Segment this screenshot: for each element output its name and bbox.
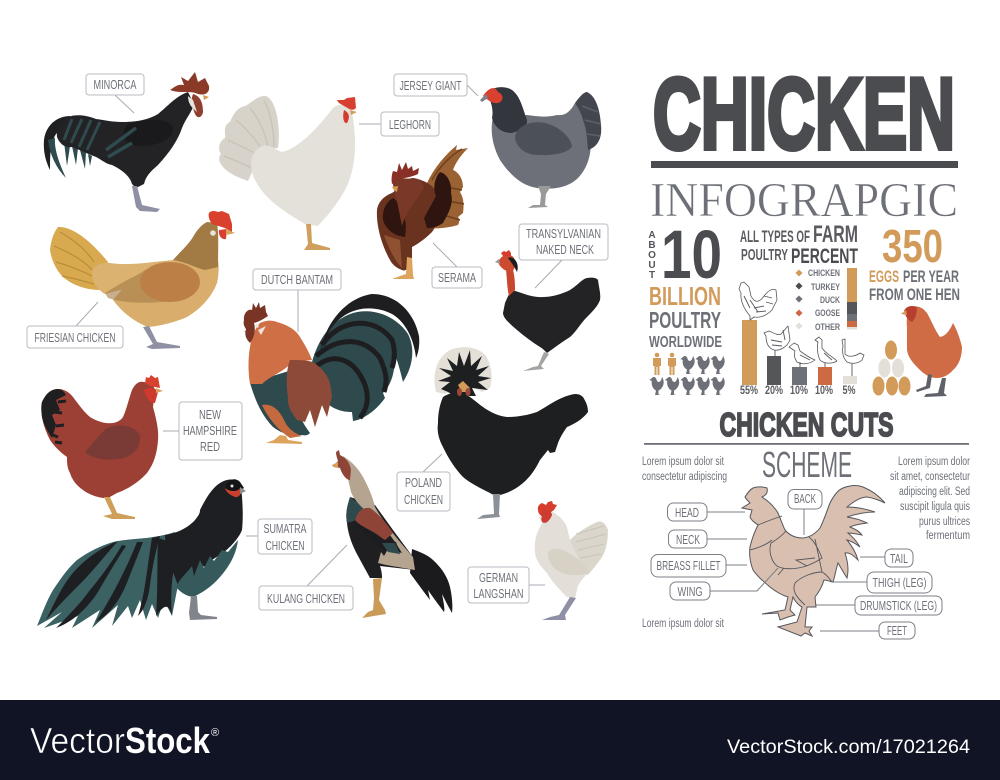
footer url: VectorStock.com/17021264 — [727, 737, 970, 758]
diagram: chicken cuts rooster — [742, 486, 885, 636]
label: German Langshan: LANGSHAN — [474, 586, 524, 601]
bar chart: poultry percentages: 20% — [765, 385, 783, 397]
callout: thigh — [833, 572, 932, 593]
text: lorem left — [642, 456, 727, 483]
label: Serama: SERAMA — [438, 270, 476, 285]
label: Minorca — [86, 74, 144, 113]
icon: line-art goose — [815, 337, 837, 367]
label: Transylvanian Naked Neck: TRANSYLVANIAN — [526, 226, 601, 241]
legend: poultry types — [795, 268, 840, 332]
stacked bar — [847, 268, 857, 330]
label: Sumatra Chicken: CHICKEN — [266, 538, 304, 553]
label: New Hampshire Red: NEW — [199, 407, 222, 422]
callout: head — [668, 503, 745, 521]
chicken: Dutch Bantam — [243, 294, 419, 444]
label: Friesian Chicken: FRIESIAN CHICKEN — [34, 330, 116, 345]
label: Leghorn — [359, 112, 439, 136]
heading: all types of farm poultry percent: POULTRY — [741, 247, 788, 264]
text: billion: BILLION — [649, 281, 721, 311]
footer logo — [30, 720, 219, 761]
icons: people to poultry ratio — [650, 353, 725, 395]
label: Transylvanian Naked Neck: NAKED NECK — [536, 242, 594, 257]
text: poultry: POULTRY — [649, 307, 721, 333]
chicken: New Hampshire Red — [41, 375, 163, 519]
label: Poland Chicken — [397, 454, 450, 511]
label: Minorca: MINORCA — [94, 77, 137, 92]
chicken: German Langshan — [535, 501, 608, 620]
label: New Hampshire Red: RED — [200, 439, 220, 454]
vertical word: about: U — [648, 260, 656, 271]
text: lorem right: Lorem ipsum dolor — [898, 456, 970, 468]
chicken: Sumatra — [37, 479, 246, 628]
number: 10: 10 — [661, 216, 722, 293]
icon: line-art turkey — [764, 326, 790, 356]
stat: 350 eggs per year — [869, 220, 960, 304]
callout: wing — [670, 568, 778, 600]
bar chart: poultry percentages: 5% — [842, 385, 856, 397]
label: Jersey Giant: JERSEY GIANT — [400, 78, 462, 93]
label: German Langshan — [468, 567, 545, 603]
chicken: Transylvanian Naked Neck — [495, 250, 600, 371]
stat: 350 eggs per year: 350 — [882, 220, 943, 272]
chicken: Poland — [435, 347, 588, 519]
callout: breast fillet — [651, 554, 747, 577]
heading: all types of farm poultry percent — [740, 221, 858, 268]
heading: chicken cuts: CHICKEN CUTS — [720, 406, 894, 443]
heading: all types of farm poultry percent: ALL TYPES OF — [740, 227, 810, 246]
vertical word: about: B — [648, 240, 656, 251]
callout: neck: NECK — [676, 532, 700, 547]
text: lorem right: adipiscing elit. Sed — [899, 486, 970, 498]
label: Sumatra Chicken: SUMATRA — [264, 521, 307, 536]
label: Dutch Bantam — [253, 269, 341, 332]
callout: tail: TAIL — [890, 551, 908, 566]
callout: tail — [860, 549, 913, 567]
label: Leghorn: LEGHORN — [389, 117, 431, 132]
text: lorem right: sit amet, consectetur — [890, 471, 970, 483]
legend: poultry types: OTHER — [815, 322, 840, 332]
vertical word: about: A — [648, 230, 656, 241]
chicken: Leghorn — [219, 96, 357, 250]
footer bar — [0, 700, 1000, 780]
bar chart: poultry percentages: 10% — [790, 385, 808, 397]
chicken: Minorca — [44, 72, 209, 212]
label: Dutch Bantam: DUTCH BANTAM — [261, 272, 333, 287]
label: Serama — [432, 243, 482, 288]
section rule — [644, 443, 969, 445]
callout: thigh: THIGH (LEG) — [872, 575, 926, 590]
heading: all types of farm poultry percent: PERCENT — [791, 245, 858, 268]
text: worldwide: WORLDWIDE — [649, 334, 722, 351]
text: lorem right: purus ultrices — [919, 516, 970, 528]
legend: poultry types: TURKEY — [811, 282, 840, 292]
footer logo: ® — [211, 727, 219, 739]
chicken: Jersey Giant — [480, 87, 601, 208]
text: lorem bottom: Lorem ipsum dolor sit — [642, 618, 725, 630]
callout: breast fillet: BREASS FILLET — [656, 558, 721, 573]
stat: 350 eggs per year: PER YEAR — [903, 267, 959, 286]
label: Poland Chicken: CHICKEN — [404, 492, 443, 507]
bar chart: poultry percentages: 55% — [740, 385, 758, 397]
text: lorem right: fermentum — [926, 530, 970, 542]
legend: poultry types: DUCK — [820, 295, 840, 305]
icon: line-art ostrich — [842, 339, 864, 376]
text: lorem right — [890, 456, 970, 542]
label: Jersey Giant — [394, 74, 478, 96]
label: New Hampshire Red: HAMPSHIRE — [183, 423, 237, 438]
text: lorem right: suscipit ligula quis — [900, 501, 970, 513]
callout: drumstick: DRUMSTICK (LEG) — [860, 598, 937, 613]
label: Poland Chicken: POLAND — [405, 475, 442, 490]
icon: line-art duck — [789, 343, 815, 367]
vertical word: about — [648, 230, 656, 281]
vertical word: about: O — [648, 250, 656, 261]
stat: about 10 billion poultry — [648, 216, 725, 395]
title rule — [651, 161, 958, 168]
label: German Langshan: GERMAN — [479, 570, 518, 585]
callout: neck — [668, 530, 747, 548]
footer logo: Stock — [125, 720, 211, 761]
bar chart: poultry percentages: 10% — [815, 385, 833, 397]
footer logo: Vector — [30, 720, 125, 761]
bar chart: poultry percentages — [739, 282, 864, 397]
heading: all types of farm poultry percent: FARM — [813, 221, 858, 248]
label: Kulang Chicken — [259, 545, 353, 610]
subtitle: Infograpgic: INFOGRAPGIC — [650, 172, 958, 227]
vertical word: about: T — [649, 270, 655, 281]
legend: poultry types: GOOSE — [815, 308, 840, 318]
chicken: Friesian — [50, 211, 235, 349]
legend: poultry types: CHICKEN — [808, 268, 840, 278]
label: New Hampshire Red — [163, 402, 242, 460]
label: Friesian Chicken — [27, 302, 123, 348]
heading: scheme: SCHEME — [762, 444, 852, 485]
callout: feet — [820, 622, 915, 639]
stat: 350 eggs per year: EGGS — [869, 267, 899, 286]
callout: drumstick — [816, 596, 942, 615]
callout: back — [788, 490, 822, 535]
icon: orange hen — [901, 306, 962, 397]
callout: back: BACK — [794, 491, 816, 506]
callout: wing: WING — [678, 584, 702, 599]
label: Kulang Chicken: KULANG CHICKEN — [267, 591, 345, 606]
label: Sumatra Chicken — [246, 519, 312, 554]
icon: pile of eggs — [872, 340, 910, 396]
stat: 350 eggs per year: FROM ONE HEN — [869, 285, 960, 304]
callout: feet: FEET — [887, 623, 907, 638]
chicken: Kulang — [332, 450, 452, 618]
icon: line-art rooster — [739, 282, 777, 320]
callout: head: HEAD — [675, 505, 699, 520]
label: Transylvanian Naked Neck — [519, 224, 608, 288]
chicken: Serama — [377, 145, 468, 279]
callouts: rooster parts — [651, 490, 942, 639]
text: lorem left: consectetur adipiscing — [642, 471, 727, 483]
text: lorem left: Lorem ipsum dolor sit — [642, 456, 725, 468]
